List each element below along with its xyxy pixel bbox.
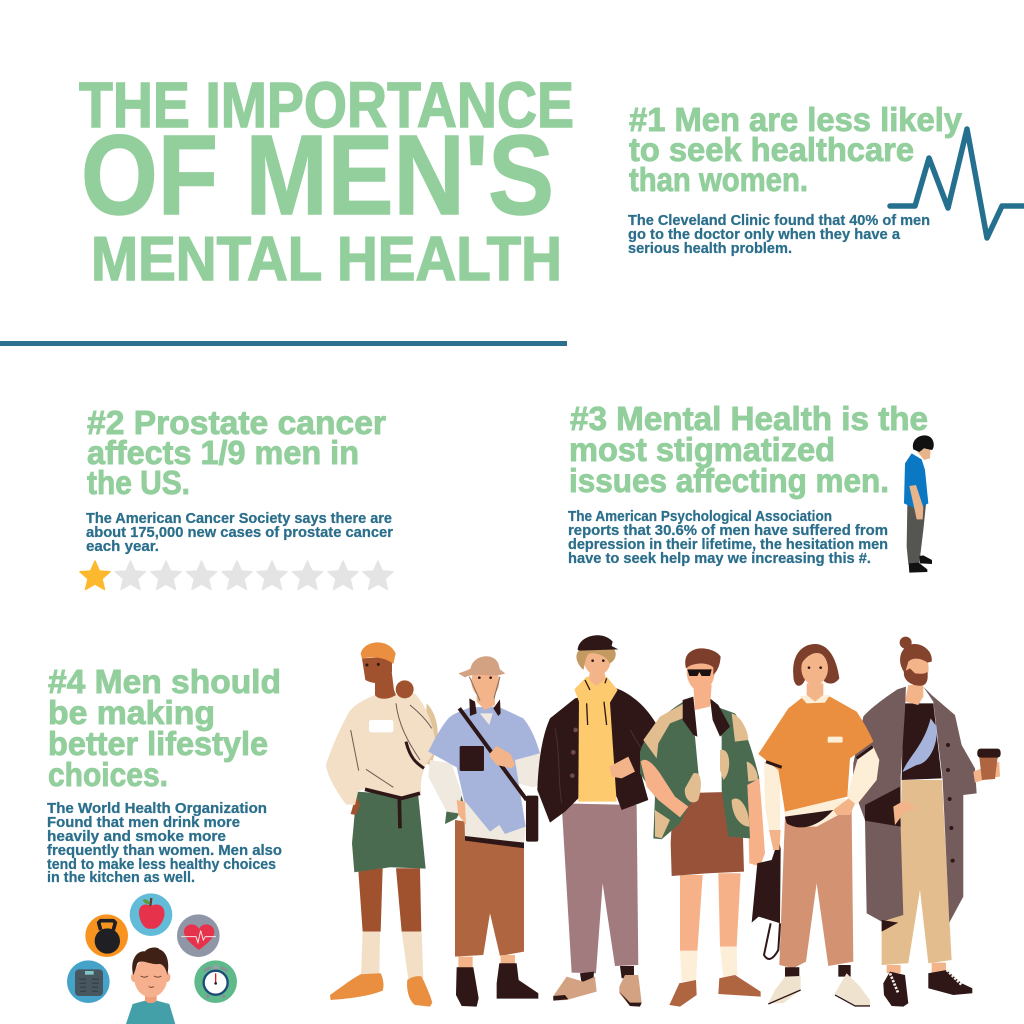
icon: calm man — [126, 948, 175, 1024]
icon: apple — [130, 893, 172, 936]
heading 2 — [87, 404, 386, 501]
title: MENTAL HEALTH — [91, 225, 562, 294]
icon: kettlebell — [85, 914, 128, 957]
text: American Psychological Association: have to seek help may we increasing this #. — [568, 551, 871, 567]
man 3: cap, black jacket, yellow hoodie — [537, 635, 656, 1007]
text: American Psychological Association: depression in their lifetime, the hesitation men — [568, 537, 888, 553]
man 1: beanie, cream sweater — [326, 642, 438, 1007]
text: American Cancer Society: about 175,000 new cases of prostate cancer — [86, 525, 393, 541]
icon: stopwatch — [194, 960, 237, 1003]
heading 4 — [48, 663, 281, 793]
text: Cleveland Clinic: serious health problem. — [628, 241, 792, 257]
section 2: prostate cancer — [80, 404, 393, 590]
heading 4: choices. — [48, 756, 168, 793]
man 2: bucket hat, blue shirt — [428, 656, 547, 1007]
icon: scale — [67, 960, 110, 1003]
icon group: healthy lifestyle — [67, 893, 237, 1024]
star rating: 1 of 9 — [80, 561, 393, 590]
text: World Health Organization: heavily and smoke more — [47, 829, 226, 845]
heading 2: #2 Prostate cancer — [87, 404, 386, 441]
text: American Psychological Association: reports that 30.6% of men have suffered from — [568, 523, 888, 539]
section 4: lifestyle — [47, 663, 282, 1024]
title — [79, 69, 574, 294]
illustration: group of men, left half — [326, 635, 656, 1007]
text: World Health Organization — [47, 801, 282, 886]
text: American Psychological Association — [568, 509, 888, 567]
text: American Psychological Association: The American Psychological Association — [568, 509, 832, 525]
man 5: long hair, orange tee, backpack — [752, 644, 879, 1006]
title: OF MEN'S — [81, 112, 554, 238]
heading 1: to seek healthcare — [629, 131, 914, 168]
text: World Health Organization: tend to make less healthy choices — [47, 857, 276, 873]
heading 4: better lifestyle — [48, 725, 268, 762]
heading 3: #3 Mental Health is the — [570, 400, 928, 437]
man 4: sunglasses, camo shirt — [640, 648, 765, 1007]
heading 2: affects 1/9 men in — [87, 434, 359, 471]
heading 1: than women. — [629, 161, 808, 198]
heading 4: be making — [48, 694, 215, 731]
heading 3: issues affecting men. — [569, 462, 889, 499]
text: American Cancer Society: each year. — [86, 539, 159, 555]
heading 2: the US. — [87, 464, 190, 501]
text: World Health Organization: frequently than women. Men also — [47, 843, 282, 859]
text: World Health Organization: Found that men drink more — [47, 815, 240, 831]
man 6: man bun, grey coat, coffee — [853, 637, 1001, 1007]
icon: heart rate — [177, 914, 220, 957]
text: World Health Organization: in the kitchen as well. — [47, 870, 195, 886]
divider — [0, 341, 567, 346]
illustration: group of men, right half — [640, 637, 1001, 1007]
text: World Health Organization: The World Health Organization — [47, 801, 267, 817]
text: Cleveland Clinic: go to the doctor only when they have a — [628, 227, 901, 243]
text: American Cancer Society — [86, 511, 393, 555]
heading 4: #4 Men should — [48, 663, 281, 700]
heading 1: #1 Men are less likely — [629, 101, 963, 138]
icon: heartbeat line — [890, 129, 1024, 238]
heading 3 — [569, 400, 928, 499]
text: American Cancer Society: The American Cancer Society says there are — [86, 511, 392, 527]
section 3: stigma — [568, 400, 934, 573]
heading 1 — [629, 101, 963, 198]
section 1: healthcare — [628, 101, 1024, 257]
heading 3: most stigmatized — [569, 431, 835, 468]
title: THE IMPORTANCE — [79, 69, 574, 141]
text: Cleveland Clinic: The Cleveland Clinic found that 40% of men — [628, 213, 930, 229]
icon: sad man looking down — [904, 435, 934, 573]
text: Cleveland Clinic — [628, 213, 930, 257]
